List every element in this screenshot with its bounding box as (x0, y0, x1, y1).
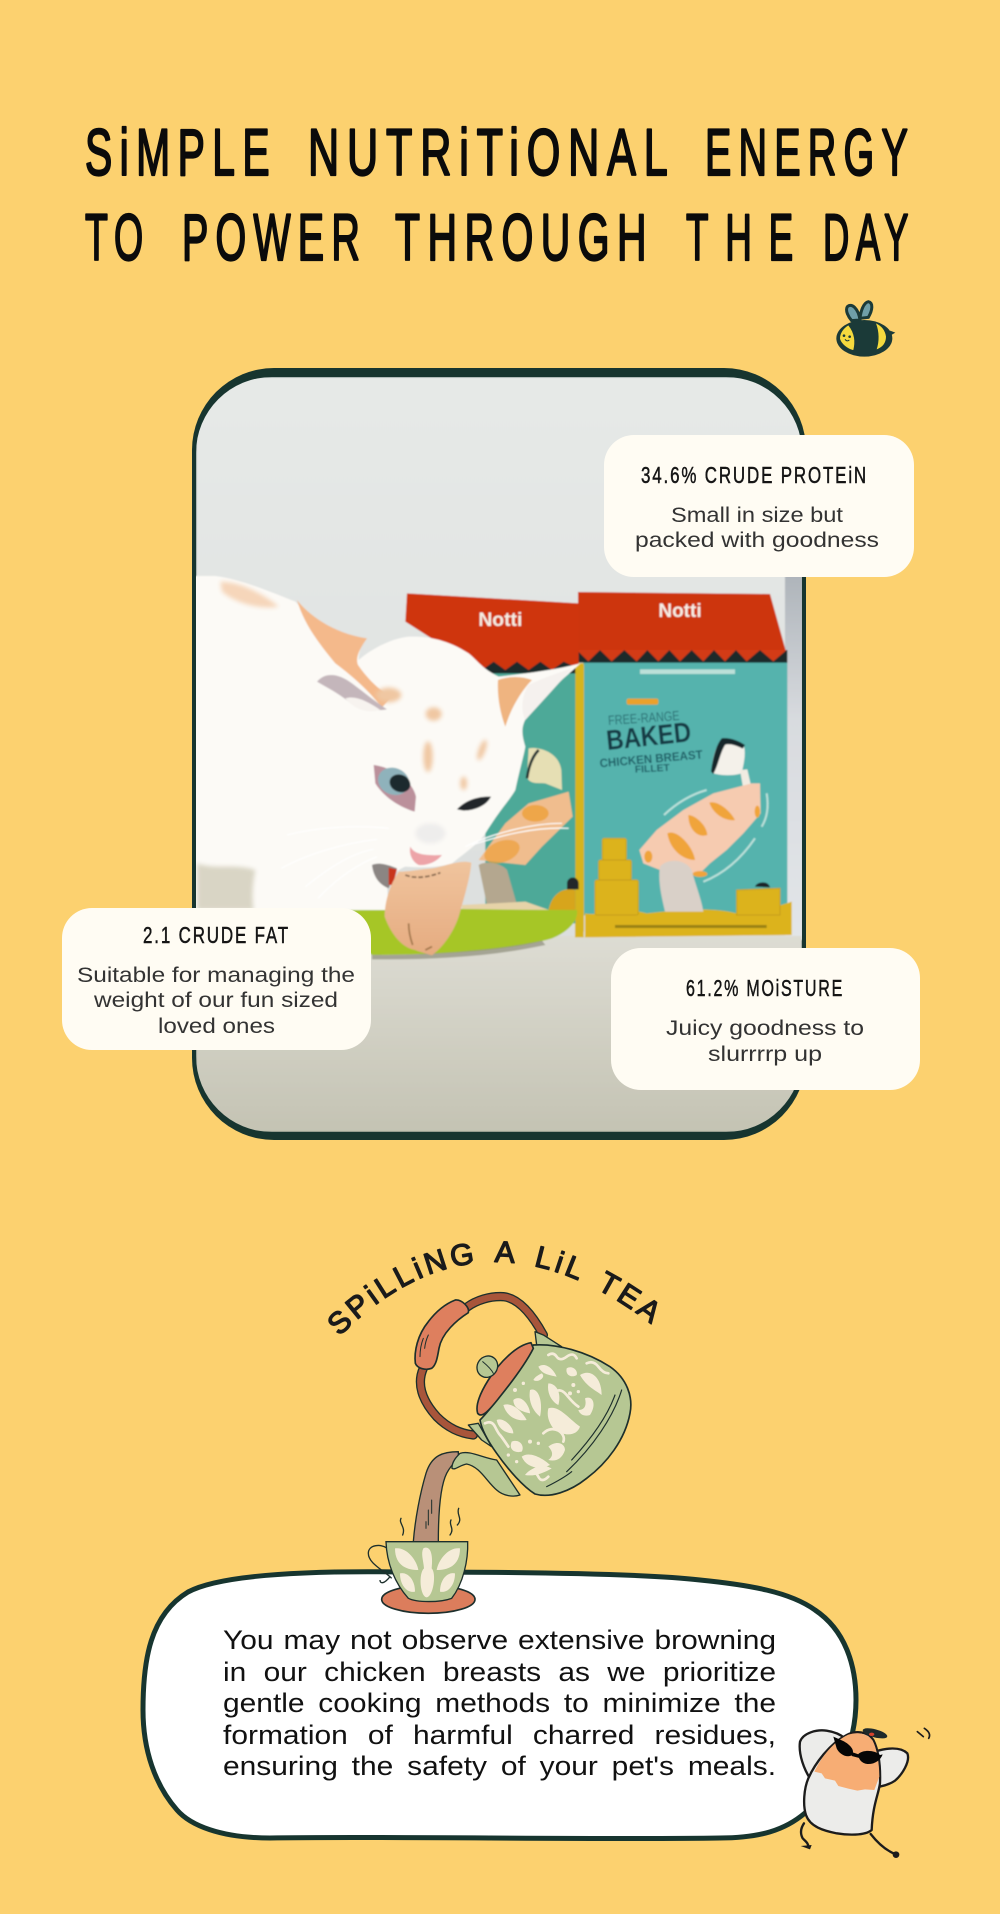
front product box (575, 592, 792, 937)
callout text: packed with goodness (635, 529, 879, 552)
speech bubble (143, 1572, 856, 1839)
callout text: loved ones (158, 1015, 275, 1038)
title: DAY (823, 200, 915, 274)
kettle pattern (497, 1365, 602, 1475)
callout text: Juicy goodness to (666, 1017, 864, 1040)
steam (400, 1508, 460, 1535)
kettle body (480, 1345, 631, 1495)
lid knob (473, 1352, 502, 1381)
photo frame (192, 368, 806, 1140)
callout text: Small in size but (671, 504, 843, 527)
callout heading: 34.6% CRUDE PROTEiN (641, 462, 868, 488)
character: chick with sunglasses (800, 1726, 930, 1858)
nose and mouth (410, 847, 442, 865)
callout: crude fat (62, 908, 371, 1050)
front product box: BAKED (605, 716, 692, 756)
callout: crude protein (604, 435, 914, 577)
callout: moisture (611, 948, 920, 1090)
text block: browning note: ensuring the safety of your pet's meals. (223, 1751, 776, 1781)
front product box: FILLET (635, 763, 670, 776)
infographic page (62, 126, 930, 1858)
arms (800, 1730, 845, 1783)
cat shading (197, 863, 255, 910)
callout heading: 61.2% MOiSTURE (686, 975, 844, 1001)
title: TO (85, 200, 150, 274)
whiskers (476, 822, 570, 844)
photo: white cat eating chicken in front of Notti boxes (185, 377, 803, 1132)
left eye (374, 763, 416, 812)
lugs (535, 1332, 562, 1347)
orange patch on back (220, 582, 279, 608)
cat right ear inner (498, 677, 532, 727)
title: POWER (182, 200, 367, 274)
back box and cat (185, 576, 584, 959)
table surface (196, 936, 802, 1132)
saucer (382, 1585, 475, 1613)
cup pattern (395, 1548, 460, 1597)
handle (420, 1297, 543, 1435)
text block: browning note: formation of harmful charred residues, (223, 1720, 776, 1750)
sunglasses (833, 1737, 883, 1764)
title: NUTRiTiONAL (308, 115, 674, 189)
callout text: Suitable for managing the (77, 964, 355, 987)
right eye (457, 797, 491, 811)
hat (862, 1726, 888, 1740)
cup body (386, 1542, 468, 1602)
lid (477, 1343, 533, 1415)
text block: browning note (223, 1625, 776, 1781)
box illustration: cat on chicken stack (712, 739, 745, 775)
icon: bee (836, 302, 895, 357)
box illustration: sand castles (595, 838, 780, 915)
back product box (405, 593, 584, 932)
body (804, 1732, 880, 1835)
wall background (196, 377, 802, 942)
kettle highlights (547, 1390, 622, 1487)
spout (452, 1453, 520, 1496)
illustration: tea cup and saucer (368, 1542, 475, 1613)
motion lines (917, 1728, 930, 1738)
chicken piece (385, 862, 471, 955)
muzzle shading (416, 824, 444, 842)
text block: browning note: in our chicken breasts as we prioritize (223, 1656, 776, 1686)
cup handle (368, 1546, 392, 1583)
cat left ear (297, 600, 392, 707)
callout text: slurrrrp up (708, 1043, 822, 1066)
forehead orange marks (376, 688, 489, 790)
callout heading: 2.1 CRUDE FAT (143, 922, 290, 948)
plate (345, 908, 577, 955)
front product box: FREE-RANGE (607, 708, 680, 728)
title (85, 115, 915, 274)
text block: browning note: You may not observe extensive browning (223, 1625, 776, 1655)
text block: browning note: gentle cooking methods to minimize the (223, 1688, 776, 1718)
title: THROUGH (395, 200, 654, 274)
front product box: Notti (658, 601, 702, 622)
title: SiMPLE (85, 115, 277, 189)
cat silhouette (185, 576, 580, 910)
orange head (814, 1733, 879, 1791)
section heading: spilling a lil tea: SPiLLiNG A LiL TEA (328, 1241, 658, 1334)
legs (801, 1823, 895, 1854)
callout text: weight of our fun sized (93, 989, 338, 1012)
title: THE (686, 200, 810, 274)
back product box: Notti (478, 610, 522, 631)
plate shadow (372, 941, 545, 959)
tea stream (413, 1452, 458, 1542)
illustration: teapot pouring tea into a cup (400, 1297, 631, 1542)
front product box: CHICKEN BREAST (599, 747, 704, 770)
